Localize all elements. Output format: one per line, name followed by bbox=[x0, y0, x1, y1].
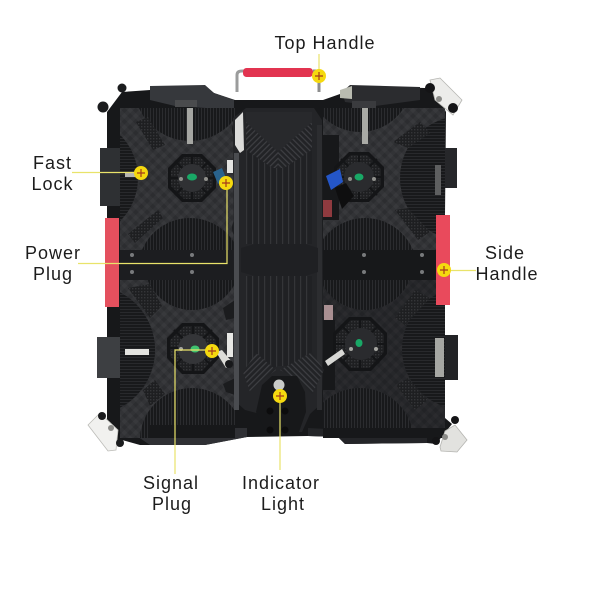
callout: power plug: Power bbox=[25, 243, 81, 263]
callout: indicator light: Light bbox=[261, 494, 305, 514]
callout: side handle: Side bbox=[485, 243, 525, 263]
fast lock posts bbox=[125, 100, 444, 377]
corner plates bbox=[88, 78, 467, 452]
hub: top left fan bbox=[168, 154, 216, 202]
hub: bottom left fan bbox=[167, 323, 219, 374]
callout: side handle: Handle bbox=[475, 264, 539, 284]
callout: side handle bbox=[437, 243, 539, 284]
callout: signal plug bbox=[143, 344, 219, 514]
right side handle bbox=[436, 215, 450, 305]
callout: indicator light bbox=[242, 389, 320, 514]
callout: indicator light: Indicator bbox=[242, 473, 320, 493]
central bridges bbox=[120, 250, 436, 280]
callout: power plug bbox=[25, 176, 233, 284]
bottom brackets bbox=[125, 428, 247, 445]
callout: top handle bbox=[274, 33, 376, 83]
centre spine bbox=[233, 108, 324, 434]
cabinet frame bbox=[97, 84, 458, 447]
callout: fast lock: Fast bbox=[33, 153, 72, 173]
hub: top right fan bbox=[334, 152, 384, 202]
top right bracket bbox=[342, 85, 420, 106]
hub: bottom right fan bbox=[333, 317, 387, 371]
callout: signal plug: Plug bbox=[152, 494, 192, 514]
module: bottom left bbox=[120, 280, 235, 438]
left side handle bbox=[105, 218, 119, 307]
panel: LED cabinet rear bbox=[88, 68, 468, 452]
module: top right bbox=[323, 108, 445, 250]
callout: signal plug: Signal bbox=[143, 473, 199, 493]
module: top left bbox=[120, 108, 235, 250]
callout: fast lock: Lock bbox=[31, 174, 74, 194]
connectors bbox=[213, 160, 354, 368]
callout: fast lock bbox=[31, 153, 148, 194]
callout: power plug: Plug bbox=[33, 264, 73, 284]
side blocks bbox=[100, 148, 122, 206]
top handle bbox=[237, 68, 319, 92]
top left bracket bbox=[150, 85, 234, 108]
callout: top handle: Top Handle bbox=[274, 33, 376, 53]
module: bottom right bbox=[323, 280, 445, 438]
